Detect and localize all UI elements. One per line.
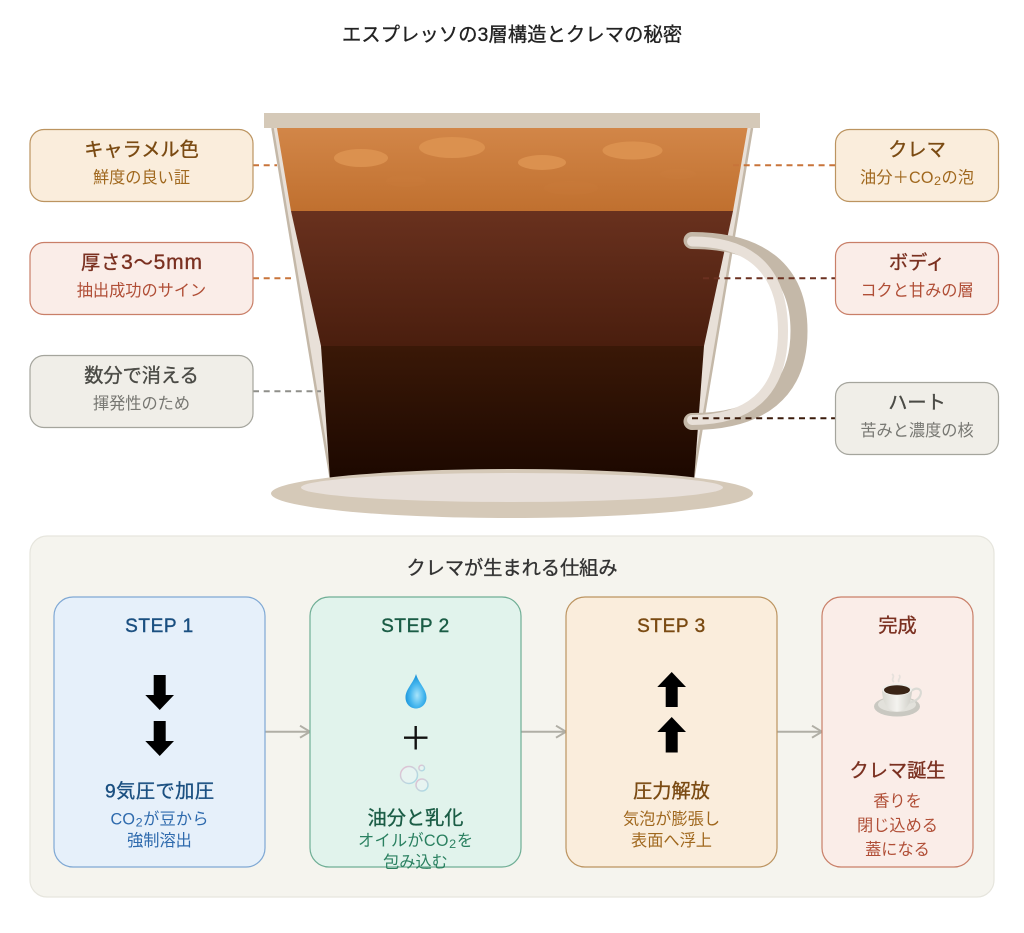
icon: coffee cup (874, 674, 921, 716)
card: finished: クレマ誕生 (850, 760, 945, 782)
label: body: コクと甘みの層 (860, 282, 974, 300)
card: step 2: 油分と乳化 (368, 808, 463, 830)
label: fades in minutes: 数分で消える (84, 365, 199, 387)
panel: how crema is formed (30, 536, 994, 897)
layer: crema (277, 128, 748, 211)
card: finished: 閉じ込める (857, 817, 938, 835)
icon: plus (404, 726, 428, 750)
icon: down arrows (145, 675, 174, 756)
label: fades in minutes: 揮発性のため (93, 395, 190, 413)
cup body (272, 128, 753, 480)
layer: heart (321, 346, 704, 480)
label: body (836, 242, 998, 314)
connector lines (253, 165, 835, 418)
label: caramel colour: 鮮度の良い証 (93, 169, 190, 187)
label: heart (836, 382, 998, 454)
label: heart: ハート (888, 393, 946, 414)
label: crema: 油分＋CO₂の泡 (860, 166, 974, 188)
card: step 3: 圧力解放 (633, 780, 710, 802)
card: finished: 完成 (878, 615, 917, 637)
label: thickness: 厚さ3〜5mm (81, 251, 202, 274)
card: step 1: 強制溶出 (127, 832, 192, 850)
panel heading: クレマが生まれる仕組み (406, 558, 618, 580)
card: finished: 蓋になる (865, 841, 930, 859)
label: caramel colour: キャラメル色 (84, 139, 199, 161)
crema bubbles (334, 137, 696, 195)
label: thickness (30, 242, 253, 314)
card: step 3: STEP 3 (637, 616, 706, 637)
icon: water drop (406, 674, 426, 708)
arrow: step 2 to step 3 (521, 726, 566, 738)
card: step 2: 包み込む (383, 854, 448, 872)
label: caramel colour (30, 130, 253, 202)
label: heart: 苦みと濃度の核 (860, 422, 974, 440)
card: step 3 (566, 597, 777, 867)
card: step 3: 気泡が膨張し (623, 810, 720, 828)
cup wall outline (272, 128, 752, 480)
saucer (271, 469, 753, 518)
card: step 1 (54, 597, 265, 867)
card: step 1: 9気圧で加圧 (105, 780, 214, 802)
label: crema: クレマ (888, 139, 946, 161)
label: fades in minutes (30, 356, 253, 428)
card: step 1: STEP 1 (125, 616, 194, 637)
title: エスプレッソの3層構造とクレマの秘密 (342, 24, 682, 46)
label: crema (836, 130, 998, 202)
espresso cup diagram (264, 113, 799, 518)
icon: bubbles (400, 765, 428, 791)
cup rim (264, 113, 760, 128)
card: finished: 香りを (873, 792, 922, 810)
card: step 3: 表面へ浮上 (631, 832, 712, 850)
card: finished (822, 597, 973, 867)
label: thickness: 抽出成功のサイン (77, 282, 206, 300)
card: step 2 (310, 597, 521, 872)
arrow: step 3 to finish (777, 726, 822, 738)
card: step 2: STEP 2 (381, 616, 450, 637)
icon: up arrows (657, 672, 686, 752)
arrow: step 1 to step 2 (265, 726, 310, 738)
layer: body (291, 211, 733, 346)
cup handle (692, 240, 799, 422)
label: body: ボディ (889, 252, 945, 274)
card: step 2: オイルがCO₂を (358, 829, 473, 851)
card: step 1: CO₂が豆から (110, 808, 208, 830)
